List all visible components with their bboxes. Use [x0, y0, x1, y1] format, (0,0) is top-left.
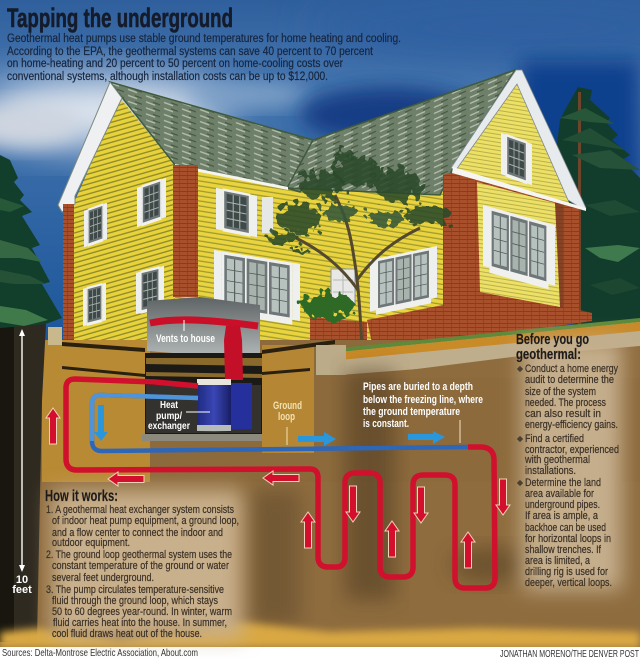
before you go text: Before you go — [516, 331, 589, 348]
label: vents to house — [156, 320, 215, 345]
before you go text backdrop — [522, 340, 622, 590]
how it works text: fluid carries heat into the house. In summer, — [53, 617, 227, 629]
before you go text: geothermal: — [516, 346, 581, 363]
before you go text: contractor, experienced — [525, 444, 619, 456]
center brick pillar — [173, 165, 198, 297]
how it works text: 50 to 60 degrees year-round. In winter, warm — [52, 606, 232, 618]
before you go text: can also result in — [525, 408, 601, 420]
right wing brick — [367, 171, 592, 348]
soil shadows — [345, 370, 395, 600]
blue flow arrows — [94, 405, 445, 446]
how it works text: How it works: — [45, 488, 118, 505]
intro paragraph: conventional systems, although installation costs can be up to $12,000. — [7, 71, 328, 83]
title: Tapping the underground — [7, 3, 233, 33]
main roof — [110, 82, 330, 192]
label: pipes depth note: is constant. — [363, 418, 409, 430]
label: vents to house: Vents to house — [156, 333, 215, 345]
intro paragraph — [7, 33, 401, 83]
how it works text: 1. A geothermal heat exchanger system consists — [46, 504, 234, 516]
red return to pump — [66, 379, 495, 588]
house — [58, 70, 592, 348]
before you go text: backhoe can be used — [525, 522, 606, 534]
before you go text: underground pipes. — [525, 499, 600, 511]
before you go text — [516, 331, 619, 589]
right roof — [287, 70, 515, 195]
intro paragraph: Geothermal heat pumps use stable ground temperatures for home heating and cooling. — [7, 33, 401, 45]
planter — [310, 317, 367, 346]
how it works text: 2. The ground loop geothermal system uses the — [46, 549, 232, 561]
before you go text: shallow trenches. If — [525, 544, 602, 556]
left corner brick — [63, 204, 74, 346]
label: heat pump: pump/ — [156, 410, 182, 422]
before you go text: installations. — [525, 465, 576, 477]
label: heat pump: exchanger — [148, 420, 190, 432]
before you go text: deeper, vertical loops. — [525, 577, 612, 589]
ground loop pipes — [66, 379, 495, 588]
before you go text: Conduct a home energy — [525, 363, 618, 375]
before you go text: size of the system — [525, 386, 596, 398]
label: pipes depth note: Pipes are buried to a depth — [363, 381, 473, 393]
how it works text: and a flow center to connect the indoor and — [52, 527, 223, 539]
how it works text: of indoor heat pump equipment, a ground loop, — [52, 515, 239, 527]
label: pipes depth note: the ground temperature — [363, 406, 460, 418]
how it works text: cool fluid draws heat out of the house. — [52, 628, 202, 640]
red vent pipe — [150, 320, 258, 380]
right wing lower siding — [477, 182, 560, 307]
label: heat pump: Heat — [160, 399, 178, 411]
how it works text: fluid through the ground loop, which stays — [52, 595, 218, 607]
label: pipes depth note — [363, 381, 483, 443]
depth scale: 10 feet — [12, 329, 32, 596]
before you go text: Determine the land — [525, 477, 601, 489]
before you go text: Find a certified — [525, 433, 584, 445]
label: ground loop — [273, 400, 302, 445]
before you go text: area is limited, a — [525, 555, 591, 567]
depth scale: 10 feet: feet — [12, 584, 32, 596]
before you go text: If area is ample, a — [525, 510, 599, 522]
orange foundation soil, left — [42, 340, 150, 482]
right wing band — [452, 167, 586, 211]
how it works text: several feet underground. — [52, 572, 154, 584]
label: ground loop: loop — [278, 411, 295, 423]
how it works text: constant temperature of the ground or water — [52, 560, 229, 572]
label: ground loop: Ground — [273, 400, 302, 412]
depth scale: 10 feet: 10 — [16, 574, 28, 586]
before you go text: energy-efficiency gains. — [525, 419, 618, 431]
blue supply line — [92, 395, 468, 451]
windows — [84, 202, 107, 248]
before you go text: audit to determine the — [525, 374, 614, 386]
orange soil, right of basement — [262, 345, 314, 453]
lower soil — [42, 482, 640, 642]
eave trim — [175, 164, 288, 190]
label: pipes depth note: below the freezing line, where — [363, 394, 483, 406]
how it works text backdrop — [52, 490, 242, 638]
middle wall siding — [175, 165, 445, 345]
intro paragraph: According to the EPA, the geothermal systems can save 40 percent to 70 percent — [7, 46, 374, 58]
left dark face — [0, 324, 46, 642]
intro paragraph: on home-heating and 20 percent to 50 percent on home-cooling costs over — [7, 58, 343, 70]
how it works text — [45, 488, 239, 640]
heat pump — [197, 379, 252, 432]
source line: Sources: Delta-Montrose Electric Association, About.com — [2, 647, 198, 659]
red flow arrows — [46, 408, 510, 568]
sandy base — [0, 622, 640, 648]
sky background — [0, 0, 640, 400]
basement cutaway — [142, 297, 262, 441]
left pine tree — [0, 155, 62, 332]
before you go text: for horizontal loops in — [525, 533, 611, 545]
before you go text: needed. The process — [525, 397, 606, 409]
left gable trim — [58, 82, 122, 212]
left wall siding — [73, 98, 175, 345]
how it works text: 3. The pump circulates temperature-sensitive — [46, 584, 224, 596]
right wing gable — [453, 76, 586, 210]
right pine tree — [555, 87, 640, 335]
before you go text: drilling rig is used for — [525, 566, 608, 578]
ground cross-section — [0, 318, 640, 659]
before you go text: with geothermal — [524, 454, 590, 466]
door — [331, 269, 355, 305]
label: heat pump — [148, 399, 210, 432]
how it works text: outdoor equipment. — [52, 537, 130, 549]
before you go text: area available for — [525, 488, 594, 500]
shade tree — [267, 149, 452, 348]
